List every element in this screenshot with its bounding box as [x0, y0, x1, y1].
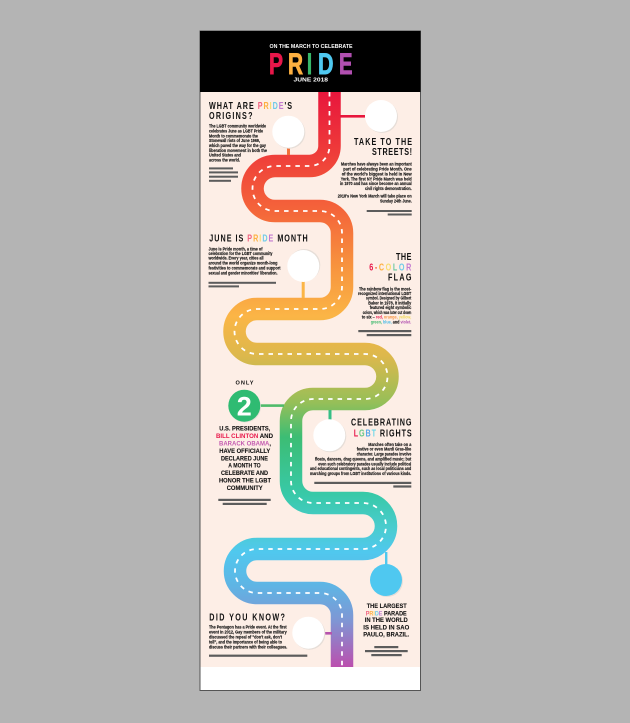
header banner	[200, 31, 420, 92]
section: take to the streets: TAKE TO THE	[354, 136, 412, 147]
section: six color flag: featured eight symbolic	[370, 305, 412, 310]
section: take to the streets: of the world's biggest is held in New	[342, 171, 412, 176]
section: largest pride parade	[363, 603, 409, 656]
section: june is pride month: JUNE IS PRIDE MONTH	[209, 233, 308, 244]
section: did you know: tell", and the importance of being able to	[209, 639, 282, 644]
section: did you know	[209, 612, 307, 657]
section: june is pride month	[208, 233, 308, 287]
circle: streets	[340, 100, 398, 133]
section: six color flag: The rainbow flag is the most-	[359, 287, 412, 292]
section: largest pride parade: PRIDE PARADE	[366, 610, 407, 617]
circle: june month	[287, 249, 320, 298]
section: six color flag: FLAG	[388, 271, 412, 283]
circle: rights	[313, 410, 346, 452]
header banner: P	[269, 48, 283, 81]
section: take to the streets: in 1970 and has since become an annual	[340, 181, 412, 186]
section: six color flag: symbol. Designed by Gilbert	[366, 296, 412, 301]
section: only two presidents: CELEBRATE AND	[221, 470, 268, 477]
winding road	[234, 92, 388, 667]
section: celebrating lgbt rights: Marches often take on a	[368, 442, 412, 447]
section: six color flag: 6-COLOR	[369, 261, 412, 273]
section: six color flag: to six – red, orange, yellow,	[362, 315, 411, 320]
section: take to the streets: 2018's New York March will take place on	[338, 193, 412, 198]
section: what are pride's origins: across the world.	[209, 158, 240, 163]
section: what are pride's origins	[208, 100, 292, 182]
section: only two presidents: A MONTH TO	[228, 462, 261, 470]
section: take to the streets: Sunday 24th June.	[380, 198, 412, 203]
section: celebrating lgbt rights: and educational contingents, such as local politicians and	[310, 466, 412, 471]
section: what are pride's origins: United States and	[209, 153, 241, 158]
section: only two presidents: COMMUNITY	[227, 485, 263, 492]
section: only two presidents: BILL CLINTON AND	[216, 433, 273, 440]
section: what are pride's origins: Stonewall riots of June 1969,	[209, 138, 260, 143]
section: largest pride parade: PAULO, BRAZIL.	[363, 632, 409, 639]
section: six color flag: THE	[396, 251, 412, 262]
header banner: R	[288, 48, 303, 81]
section: june is pride month: festivities to commemorate and support	[208, 266, 281, 271]
section: did you know: discussed the repeal of "don't ask, don't	[209, 634, 282, 639]
section: six color flag: colors, which was later cut down	[363, 310, 412, 315]
section: what are pride's origins: WHAT ARE PRIDE'S	[209, 100, 292, 111]
circle: origins	[272, 116, 305, 155]
section: largest pride parade: IS HELD IN SAO	[363, 624, 409, 631]
section: what are pride's origins: Month to commemorate the	[209, 133, 259, 138]
section: celebrating lgbt rights: festive or even Mardi Gras-like	[357, 447, 412, 452]
section: only two presidents: HONOR THE LGBT	[219, 478, 271, 484]
section: celebrating lgbt rights: floats, dancers, drag queens, and amplified music; but	[315, 457, 412, 462]
section: take to the streets: STREETS!	[372, 146, 412, 157]
section: celebrating lgbt rights: CELEBRATING	[351, 417, 412, 428]
section: only two presidents	[216, 381, 284, 505]
section: did you know: event in 2012, Gay members of the military	[209, 630, 287, 635]
section: only two presidents: 2	[237, 392, 252, 422]
section: largest pride parade: THE LARGEST	[367, 603, 407, 610]
section: celebrating lgbt rights	[310, 417, 412, 488]
section: celebrating lgbt rights: character. Large parades involve	[357, 452, 412, 457]
section: celebrating lgbt rights: marching groups from LGBT institutions of various kinds.	[310, 471, 411, 476]
section: did you know: DID YOU KNOW?	[209, 612, 285, 623]
section: take to the streets: Marches have always been an important	[341, 162, 412, 167]
section: what are pride's origins: liberation movement in both the	[209, 148, 268, 153]
section: only two presidents: DECLARED JUNE	[221, 456, 268, 462]
header banner: ON THE MARCH TO CELEBRATE	[270, 44, 353, 50]
section: take to the streets: York. The first NY Pride March was held	[341, 176, 412, 181]
section: what are pride's origins: ORIGINS?	[209, 110, 252, 121]
circle: did you know	[292, 617, 332, 650]
header banner: I	[307, 48, 312, 81]
section: take to the streets	[338, 136, 412, 216]
section: six color flag: green, blue, and violet.	[371, 319, 411, 324]
section: only two presidents: BARACK OBAMA,	[219, 440, 271, 448]
header banner: D	[318, 48, 334, 81]
section: six color flag: Baker in 1978, it initially	[368, 300, 412, 305]
section: only two presidents: ONLY	[236, 381, 254, 387]
section: june is pride month: celebration for the LGBT community	[208, 251, 273, 256]
section: june is pride month: June is Pride month, a time of	[208, 246, 263, 251]
section: six color flag	[358, 251, 412, 336]
section: what are pride's origins: celebrates June as LGBT Pride	[209, 128, 264, 134]
section: only two presidents: HAVE OFFICIALLY	[219, 448, 271, 455]
section: take to the streets: civil rights demonstration.	[365, 186, 412, 191]
section: celebrating lgbt rights: LGBT RIGHTS	[354, 427, 412, 439]
header banner: JUNE 2018	[294, 78, 328, 84]
section: largest pride parade: IN THE WORLD	[365, 617, 408, 624]
section: june is pride month: sexual and gender minorities' liberation.	[208, 271, 278, 276]
section: only two presidents: U.S. PRESIDENTS,	[219, 426, 270, 432]
section: six color flag: recognized international LGBT	[358, 291, 412, 296]
section: take to the streets: part of celebrating Pride Month. One	[343, 166, 412, 171]
section: did you know: The Pentagon has a Pride event. At the first	[209, 625, 287, 630]
section: june is pride month: worldwide. Every year, cities all	[208, 256, 264, 261]
section: what are pride's origins: The LGBT community worldwide	[209, 124, 267, 129]
circle: blue parade	[370, 552, 403, 597]
section: june is pride month: around the world organize month-long	[208, 261, 278, 266]
header banner: E	[339, 48, 352, 81]
section: what are pride's origins: which paved the way for the gay	[208, 143, 267, 148]
section: celebrating lgbt rights: even such celebratory parades usually include political	[318, 461, 411, 466]
artboard	[200, 31, 420, 690]
section: did you know: discuss their partners with their colleagues.	[209, 644, 287, 649]
